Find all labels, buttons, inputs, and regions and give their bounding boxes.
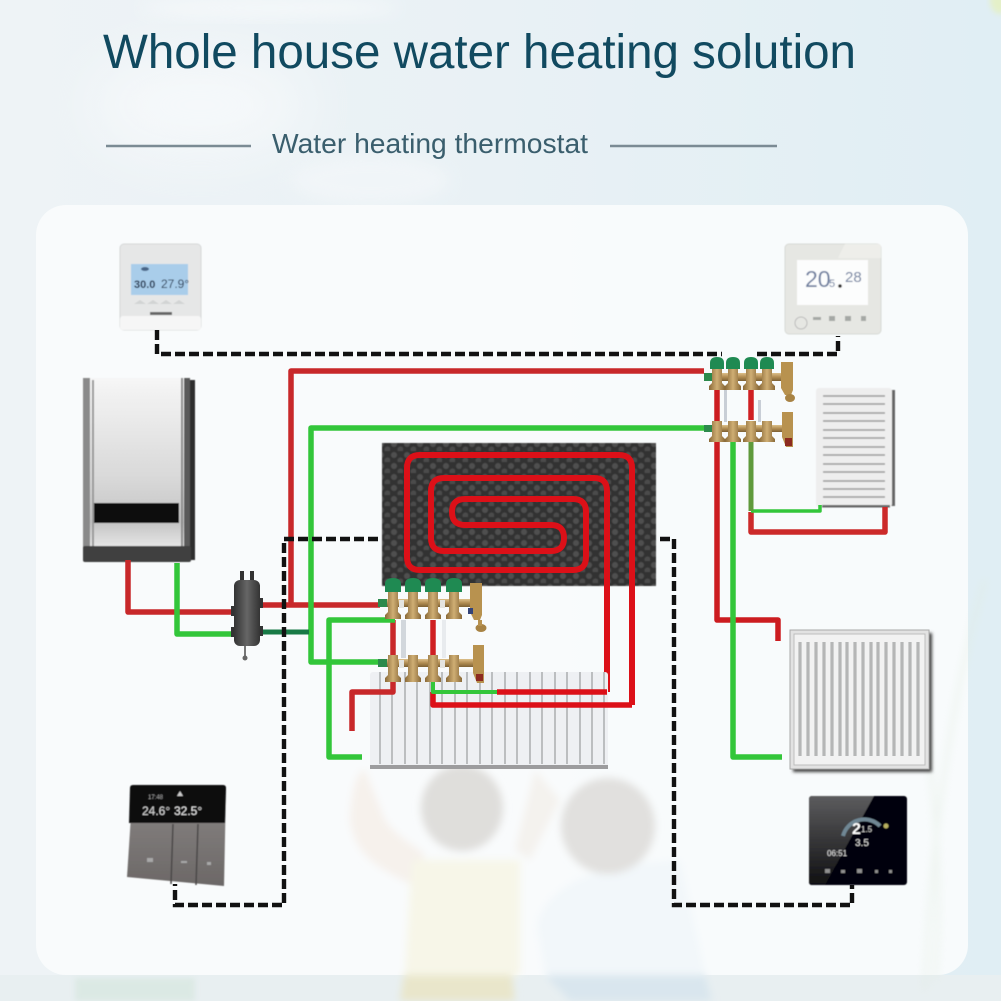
subtitle: Water heating thermostat: [272, 128, 588, 159]
thermostat: bottom right: 1.5: [861, 825, 873, 834]
thermostat: top left: 30.0: [134, 279, 155, 291]
manifold: top right upper: [704, 357, 795, 422]
thermostat: bottom left: 17:48: [148, 795, 164, 801]
wiring: top control line: [157, 330, 838, 354]
green return pipes: [177, 428, 820, 757]
thermostat: bottom right: [809, 796, 907, 885]
thermostat: top right: [785, 244, 881, 334]
divider left: [106, 145, 251, 147]
radiator: top right: [816, 388, 895, 508]
floor heating mat: [382, 443, 656, 586]
title: Whole house water heating solution: [103, 26, 856, 79]
thermostat: bottom left: 24.6°: [142, 804, 170, 818]
radiator: center: [370, 672, 608, 769]
radiator: right: [790, 630, 932, 772]
hydraulic separator: [231, 571, 263, 660]
faded plant on the right edge: [905, 580, 985, 990]
thermostat: bottom left: 32.5°: [174, 804, 202, 818]
wiring: right control line: [660, 539, 852, 905]
panel: diagram card: [36, 205, 968, 975]
manifold: center upper: [378, 578, 486, 632]
manifold: center lower: [378, 620, 484, 683]
thermostat: top right: 20: [805, 266, 831, 292]
thermostat: bottom right: 3.5: [855, 838, 869, 849]
wiring: left control line: [175, 539, 378, 905]
thermostat: bottom right: 2: [852, 821, 861, 838]
divider right: [610, 145, 777, 147]
floor heating coil pipe: [407, 455, 632, 705]
manifold: top right lower: [704, 412, 793, 447]
red supply pipes: [128, 371, 885, 731]
thermostat: top right: 5: [829, 278, 835, 290]
dark green link pipes: [260, 442, 751, 632]
thermostat: bottom right: 06:51: [827, 849, 848, 858]
thermostat: top left: [120, 244, 201, 330]
children silhouette in faded photo: [350, 765, 712, 1001]
thermostat: top right: 28: [845, 269, 862, 286]
thermostat: top left: 27.9°: [161, 277, 189, 291]
boiler: [83, 378, 195, 562]
thermostat: bottom left: [127, 785, 226, 886]
